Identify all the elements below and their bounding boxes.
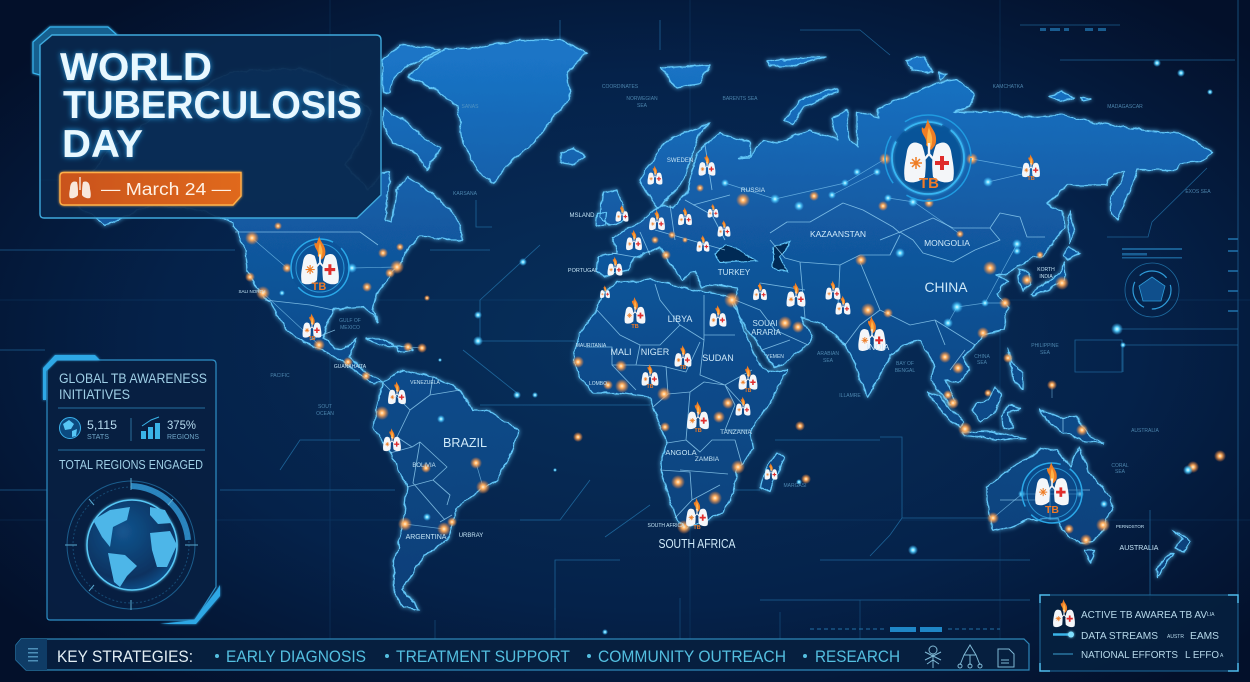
country labels: MONGOLIA	[924, 238, 970, 248]
country labels: MSLAND	[569, 213, 595, 219]
strategies heading: KEY STRATEGIES:	[57, 647, 193, 666]
stat: 5,115 stats: STATS	[87, 432, 109, 441]
continent: Africa	[573, 280, 787, 528]
world map	[70, 40, 1213, 610]
stat: 5,115 stats: 5,115	[87, 418, 117, 432]
continent: Canadian arctic islands	[365, 45, 440, 351]
country labels: INDIA	[1039, 274, 1053, 280]
panel heading: INITIATIVES	[59, 387, 130, 402]
icon: globe	[60, 418, 80, 438]
country labels: ZAMBIA	[695, 456, 720, 463]
continent: Australia	[987, 447, 1112, 543]
country labels: BRAZIL	[443, 435, 487, 450]
sea and minor place labels: ILLAMRE	[839, 393, 861, 399]
heading: DAY	[62, 123, 143, 166]
continent: Eurasia	[597, 80, 1213, 405]
country labels: MAURITANIA	[576, 343, 607, 349]
sea and minor place labels: SOUT	[318, 404, 332, 410]
legend item: national efforts: A	[1220, 653, 1224, 659]
network connections	[252, 159, 1080, 529]
TB captions on lung markers: TB	[1027, 176, 1035, 182]
country labels: RUSSIA	[741, 187, 766, 194]
sea and minor place labels: SEA	[1115, 469, 1126, 475]
legend item: active TB: ACTIVE TB AWAREA TB AV	[1081, 609, 1207, 621]
sea and minor place labels: EXOS SEA	[1185, 189, 1211, 195]
stat: 375% regions	[141, 417, 199, 441]
country labels: ANGOLA	[665, 448, 697, 457]
subheading: TOTAL REGIONS ENGAGED	[59, 457, 203, 472]
country labels: SOUTH AFRICA	[648, 523, 685, 529]
continent: Madagascar	[761, 453, 783, 492]
sea and minor place labels: BAY OF	[896, 361, 914, 367]
heading	[60, 46, 362, 166]
data bars bottom centre	[810, 627, 1000, 632]
TB captions on lung markers: TB	[680, 365, 687, 371]
strategy icons	[925, 645, 1014, 668]
sea and minor place labels: MEXICO	[340, 325, 360, 331]
sea and minor place labels: ARABIAN	[817, 351, 839, 357]
country labels: SOUAI	[753, 319, 777, 328]
strategy list: EARLY DIAGNOSIS	[226, 647, 366, 666]
icon: rising bars	[141, 417, 160, 439]
icon: large TB lung marker over United States	[291, 236, 349, 297]
country labels: KAZAANSTAN	[810, 229, 866, 239]
country labels: SUDAN	[702, 353, 734, 363]
country labels: MALI	[610, 347, 632, 357]
country labels: LIBYA	[668, 314, 692, 324]
country labels	[239, 158, 1159, 552]
TB captions on lung markers: TB	[647, 384, 654, 390]
stat: 375% regions: REGIONS	[167, 432, 199, 441]
sea and minor place labels	[270, 84, 1211, 489]
country labels: CHINA	[924, 279, 968, 295]
panel heading	[59, 371, 207, 402]
country labels: GUANAHAITA	[334, 364, 367, 370]
continent: South America	[373, 370, 518, 610]
country labels: TURKEY	[718, 268, 751, 277]
sea and minor place labels: MARGASI	[783, 483, 807, 489]
sea and minor place labels: CHINA	[974, 354, 990, 360]
legend item: national efforts	[1053, 649, 1224, 661]
sea and minor place labels: OCEAN	[316, 411, 334, 417]
country labels: YEMEN	[766, 354, 784, 360]
strategy list: RESEARCH	[815, 647, 900, 666]
TB captions on lung markers: TB	[694, 428, 702, 434]
TB captions on lung markers: TB	[745, 388, 752, 394]
country labels: BOLIVIA	[412, 463, 436, 469]
legend item: data streams	[1053, 630, 1219, 642]
sea and minor place labels: KAMCHATKA	[993, 84, 1024, 90]
legend item: data streams: EAMS	[1190, 630, 1219, 642]
sea and minor place labels: AUSTRALIA	[1131, 428, 1160, 434]
continent: Greenland	[408, 40, 587, 183]
country labels: ARGENTINA	[406, 534, 447, 541]
strategy list	[215, 647, 900, 666]
legend item: active TB	[1053, 599, 1215, 627]
panel: global TB awareness initiatives	[43, 355, 220, 624]
TB captions on lung markers: TB	[309, 336, 316, 342]
globe dial	[65, 478, 198, 610]
country labels: SALI NORTH	[239, 289, 265, 294]
TB captions on lung markers: TB	[631, 324, 639, 330]
heading: TUBERCULOSIS	[63, 84, 362, 127]
legend item: national efforts: L EFFO	[1185, 649, 1219, 661]
icons: small TB lung markers	[303, 154, 1040, 526]
sea and minor place labels: SANAS	[462, 104, 479, 110]
country labels: INDIA	[867, 342, 890, 352]
country labels: KORTH	[1037, 267, 1055, 273]
sea and minor place labels: CORAL	[1111, 463, 1129, 469]
sea and minor place labels: KARSANA	[453, 191, 478, 197]
sea and minor place labels: COORDINATES	[602, 84, 639, 90]
legend item: data streams: DATA STREAMS	[1081, 630, 1158, 642]
stat: 375% regions: 375%	[167, 418, 196, 432]
country labels: SWEDEN	[667, 158, 693, 164]
islands: Tasmania and New Zealand	[1085, 530, 1190, 577]
icon: lungs	[69, 177, 91, 198]
sea and minor place labels: SEA	[1040, 350, 1051, 356]
islands: Southeast Asia	[927, 347, 1103, 443]
legend item: active TB: LIA	[1207, 612, 1215, 618]
sea and minor place labels: PHILIPPINE	[1031, 343, 1059, 349]
sea and minor place labels: BENGAL	[895, 368, 915, 374]
sea and minor place labels: PACIFIC	[270, 373, 290, 379]
strategy list: COMMUNITY OUTREACH	[598, 647, 786, 666]
sea and minor place labels: SEA	[637, 103, 648, 109]
panel heading: GLOBAL TB AWARENESS	[59, 371, 207, 386]
country labels: LOMBO	[589, 381, 607, 387]
TB captions on lung markers: TB	[919, 175, 939, 192]
islands: Japan, Korea, Sakhalin	[1018, 210, 1080, 297]
continent: North America	[70, 68, 463, 384]
country labels: PERNDSTOR	[1116, 524, 1145, 529]
sea and minor place labels: MADAGASCAR	[1107, 104, 1143, 110]
sea and minor place labels: NORWEGIAN	[626, 96, 658, 102]
icon: large TB lung marker over Australia	[1022, 462, 1082, 523]
country borders	[235, 145, 1090, 522]
legend item: national efforts: NATIONAL EFFORTS	[1081, 649, 1178, 661]
sea and minor place labels: BARENTS SEA	[722, 96, 758, 102]
sea and minor place labels: SEA	[977, 360, 988, 366]
country labels: TANZANIA	[720, 429, 752, 436]
panel: title	[33, 27, 381, 218]
country labels: NIGER	[641, 347, 670, 357]
country labels: AUSTRALIA	[1120, 545, 1159, 552]
sea and minor place labels: SEA	[823, 358, 834, 364]
country labels: SOUTH AFRICA	[658, 537, 736, 551]
TB captions on lung markers: TB	[312, 281, 326, 293]
data readout top right	[1040, 28, 1238, 312]
TB captions on lung markers: TB	[1045, 504, 1059, 516]
strategies bar	[16, 639, 1029, 670]
country labels: URBRAY	[459, 533, 483, 539]
TB captions on lung markers: TB	[693, 525, 701, 531]
legend item: data streams: AUSTR	[1167, 634, 1184, 640]
icon: large TB lung marker over Russia	[885, 115, 971, 201]
legend	[1040, 595, 1238, 671]
country labels: ARARIA	[751, 328, 782, 337]
TB captions on lung markers	[309, 175, 1059, 531]
date badge	[60, 172, 241, 205]
country labels: PORTUGAL	[568, 268, 598, 274]
hotspot glow dots	[245, 59, 1226, 635]
heading: WORLD	[60, 46, 212, 89]
radar widget	[1125, 263, 1179, 317]
stat: 5,115 stats	[60, 418, 117, 441]
strategy list: TREATMENT SUPPORT	[396, 647, 570, 666]
continent: Scandinavia	[640, 123, 710, 207]
inland seas	[715, 242, 790, 273]
sea and minor place labels: GULF OF	[339, 318, 361, 324]
country labels: VENEZUELA	[410, 380, 441, 386]
date badge: — March 24 —	[101, 179, 232, 199]
islands: UK, Ireland, Iceland, Svalbard, Novaya Zemlya, Arctic	[560, 57, 1092, 226]
